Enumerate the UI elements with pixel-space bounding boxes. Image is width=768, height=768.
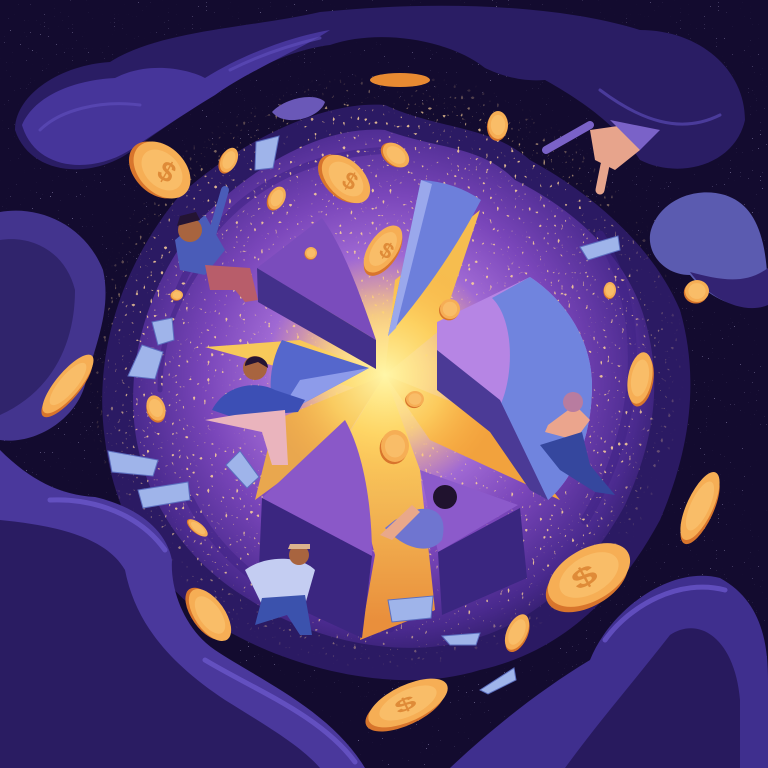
vortex swirl bands (160, 150, 632, 628)
coins (33, 73, 729, 742)
banknotes (108, 136, 620, 694)
coin upper centre (309, 144, 379, 214)
coin small (215, 144, 242, 177)
coin centre (354, 219, 412, 282)
coin far left (33, 348, 102, 424)
coin left (142, 393, 170, 425)
coin small left (184, 516, 210, 540)
dollar signs on large coins: $ (337, 166, 363, 197)
cloud: left (0, 211, 106, 441)
dollar signs on large coins: $ (391, 691, 420, 718)
person: centre bottom curled (380, 485, 457, 549)
coin large lower right (533, 530, 643, 625)
coin small (263, 183, 289, 214)
pie slice: top blue wedge (388, 180, 481, 336)
person: right climbing (540, 392, 615, 495)
person: left running (205, 356, 305, 465)
person: lower left with hat (245, 544, 315, 635)
pie slice: right large (437, 277, 592, 500)
vortex disc (102, 105, 690, 680)
pie slice: left small blue (271, 340, 369, 418)
coin tiny (304, 247, 317, 260)
person: top right tumbling (546, 120, 660, 190)
coin right upper (684, 280, 709, 304)
coin large upper left (118, 128, 202, 212)
coin lower left (177, 579, 239, 649)
cloud: top right (650, 192, 768, 308)
dollar signs on large coins: $ (152, 154, 182, 189)
sparks (90, 74, 680, 667)
pie slice: bottom right (420, 470, 527, 615)
coin tiny (603, 282, 616, 299)
coin bottom (358, 669, 456, 742)
dollar signs on large coins: $ (566, 557, 603, 596)
coin (376, 137, 414, 173)
pie slice: top left (257, 218, 376, 369)
cloud wisp: upper (272, 97, 325, 120)
clouds: bottom right (450, 576, 768, 768)
coin near centre (439, 299, 460, 320)
light rays from centre (205, 210, 560, 640)
coin top right (487, 111, 508, 141)
pie slice: bottom left (258, 420, 372, 638)
coin top edge (370, 73, 430, 87)
dollar signs on large coins: $ (375, 237, 398, 264)
coin lower (499, 611, 535, 656)
clouds: top (15, 6, 745, 169)
coin far right (671, 467, 729, 549)
person: upper left floating (175, 190, 258, 302)
coin right (623, 350, 658, 409)
coin below centre (380, 430, 409, 464)
coin near centre (405, 391, 424, 408)
clouds: bottom left (0, 450, 365, 768)
coin tiny (170, 290, 183, 301)
dollar signs on large coins (152, 154, 603, 718)
